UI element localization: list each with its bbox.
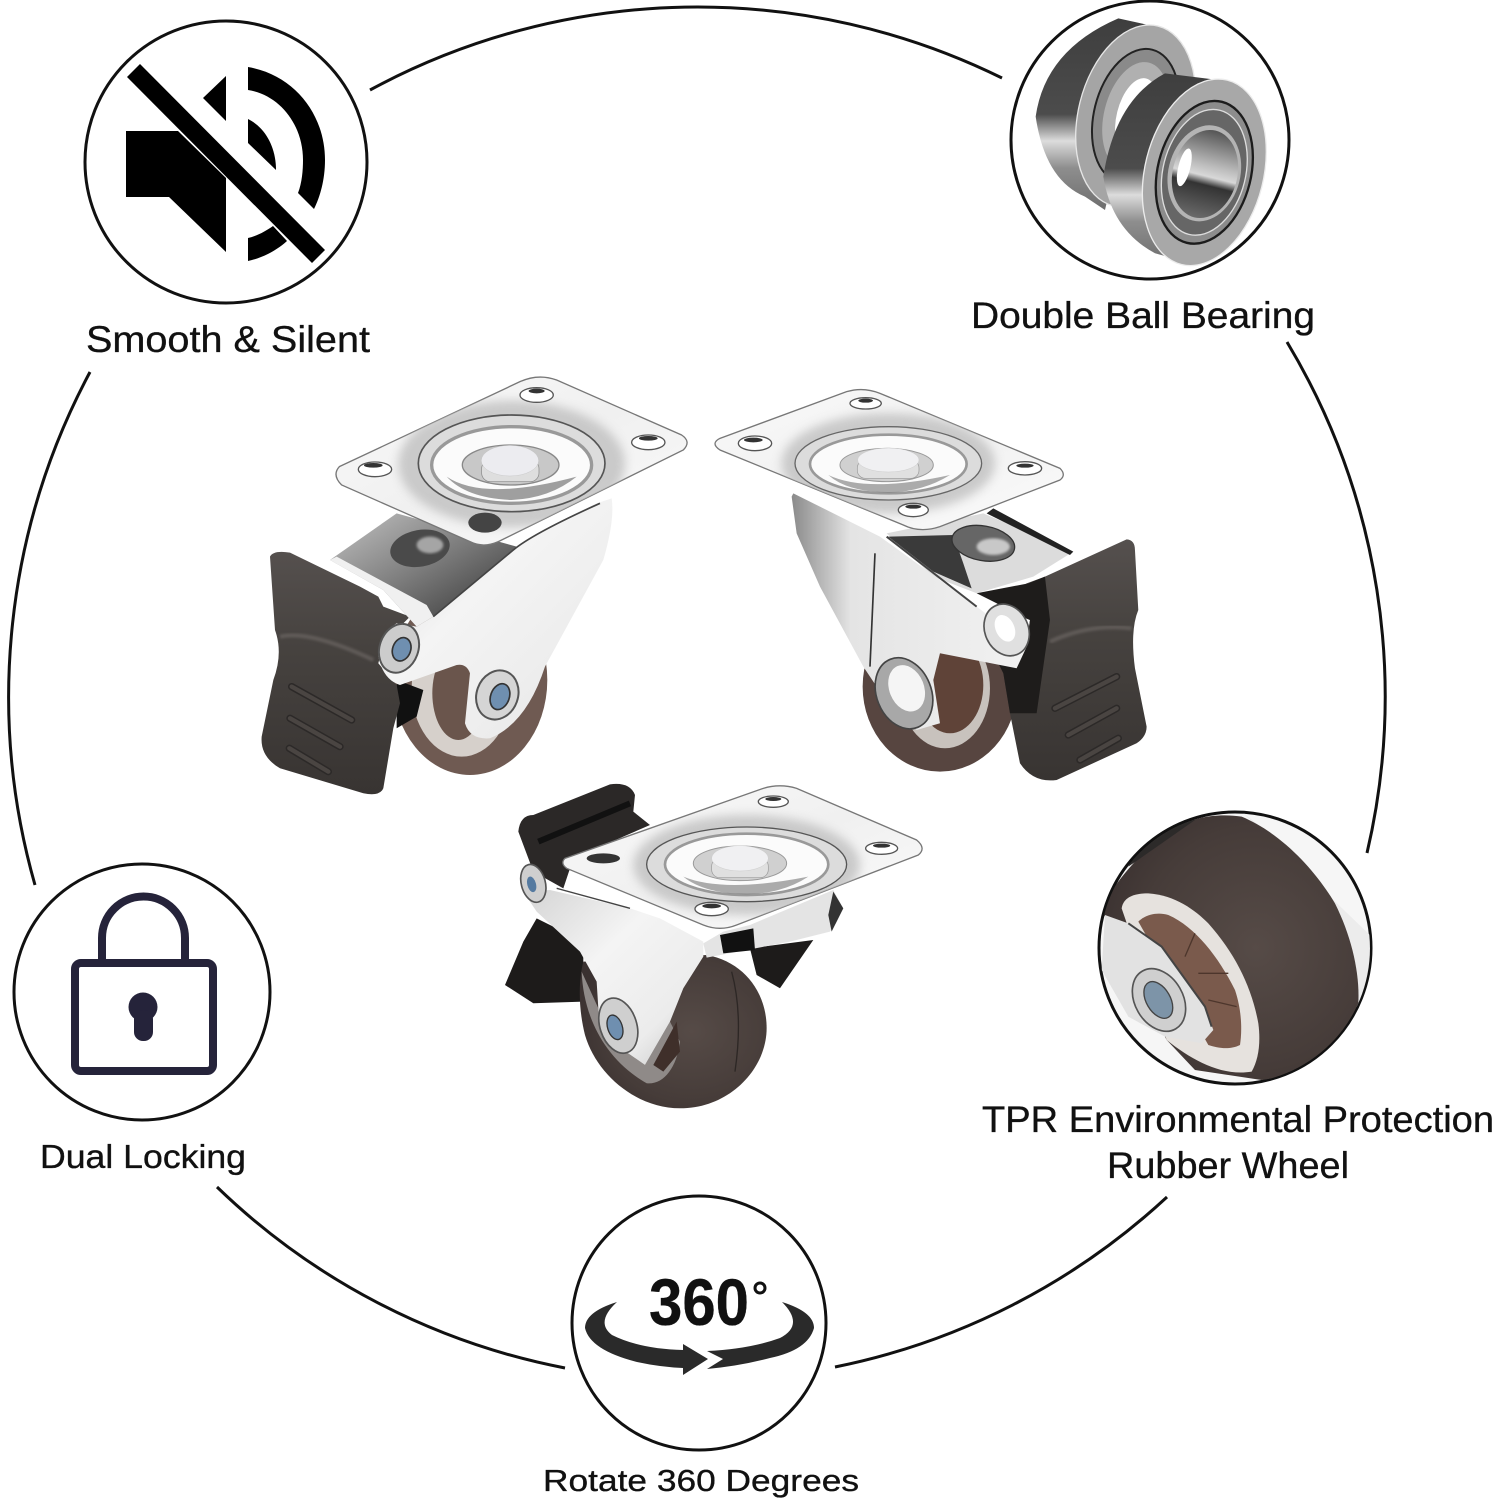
label: smooth and silent: Smooth & Silent xyxy=(86,319,371,360)
lever ribs xyxy=(289,687,352,772)
black link xyxy=(397,680,423,728)
label: double ball bearing: Double Ball Bearing xyxy=(971,295,1315,336)
bolt xyxy=(1132,968,1186,1032)
label: TPR rubber wheel: Rubber Wheel xyxy=(1107,1145,1349,1186)
caster: bottom xyxy=(505,784,922,1108)
yoke xyxy=(792,493,1028,730)
top plate xyxy=(563,786,922,928)
yoke xyxy=(523,890,703,1065)
mounting holes xyxy=(358,388,665,477)
chrome dome xyxy=(865,649,943,738)
label: rotate 360 degrees: Rotate 360 Degrees xyxy=(543,1463,859,1498)
tyre xyxy=(1102,815,1359,1080)
wheel xyxy=(393,585,547,775)
brown hub xyxy=(1138,914,1241,1048)
caster: top left xyxy=(262,377,687,794)
mounting holes xyxy=(695,796,898,916)
front bearing face xyxy=(1142,78,1267,266)
yoke xyxy=(378,498,612,738)
icon: rotate 360 degrees: 360 xyxy=(649,1265,749,1339)
chrome cap bolt xyxy=(976,597,1038,663)
brake lever xyxy=(993,539,1147,780)
icon: dual locking padlock xyxy=(14,864,270,1120)
mounting holes xyxy=(738,398,1042,517)
rear bearing xyxy=(1036,18,1148,210)
bolts xyxy=(592,993,645,1058)
label: TPR rubber wheel xyxy=(982,1099,1494,1186)
icon: smooth and silent muted speaker xyxy=(85,21,367,303)
wheel xyxy=(863,602,1017,772)
white rim xyxy=(1122,893,1259,1073)
caster: top right xyxy=(715,390,1147,780)
icon: rubber wheel close-up xyxy=(1099,812,1372,1084)
icon: double ball bearing xyxy=(1011,1,1289,279)
label: TPR rubber wheel: TPR Environmental Protection xyxy=(982,1099,1494,1140)
label: dual locking: Dual Locking xyxy=(40,1138,246,1175)
top plate xyxy=(715,390,1063,530)
wheel xyxy=(580,955,767,1108)
lever ribs xyxy=(1055,677,1118,760)
brake lever xyxy=(262,552,410,794)
front bearing body xyxy=(1103,73,1218,263)
swivel band xyxy=(703,890,843,958)
top plate xyxy=(336,377,687,545)
bolts xyxy=(372,618,426,678)
brake top plate xyxy=(330,513,517,627)
rim edge xyxy=(1242,812,1372,1010)
chrome arm xyxy=(1102,915,1213,1043)
icon: rotate 360 degrees xyxy=(572,1196,826,1450)
brake lever far side xyxy=(518,784,650,888)
brake top plate xyxy=(887,513,1073,593)
